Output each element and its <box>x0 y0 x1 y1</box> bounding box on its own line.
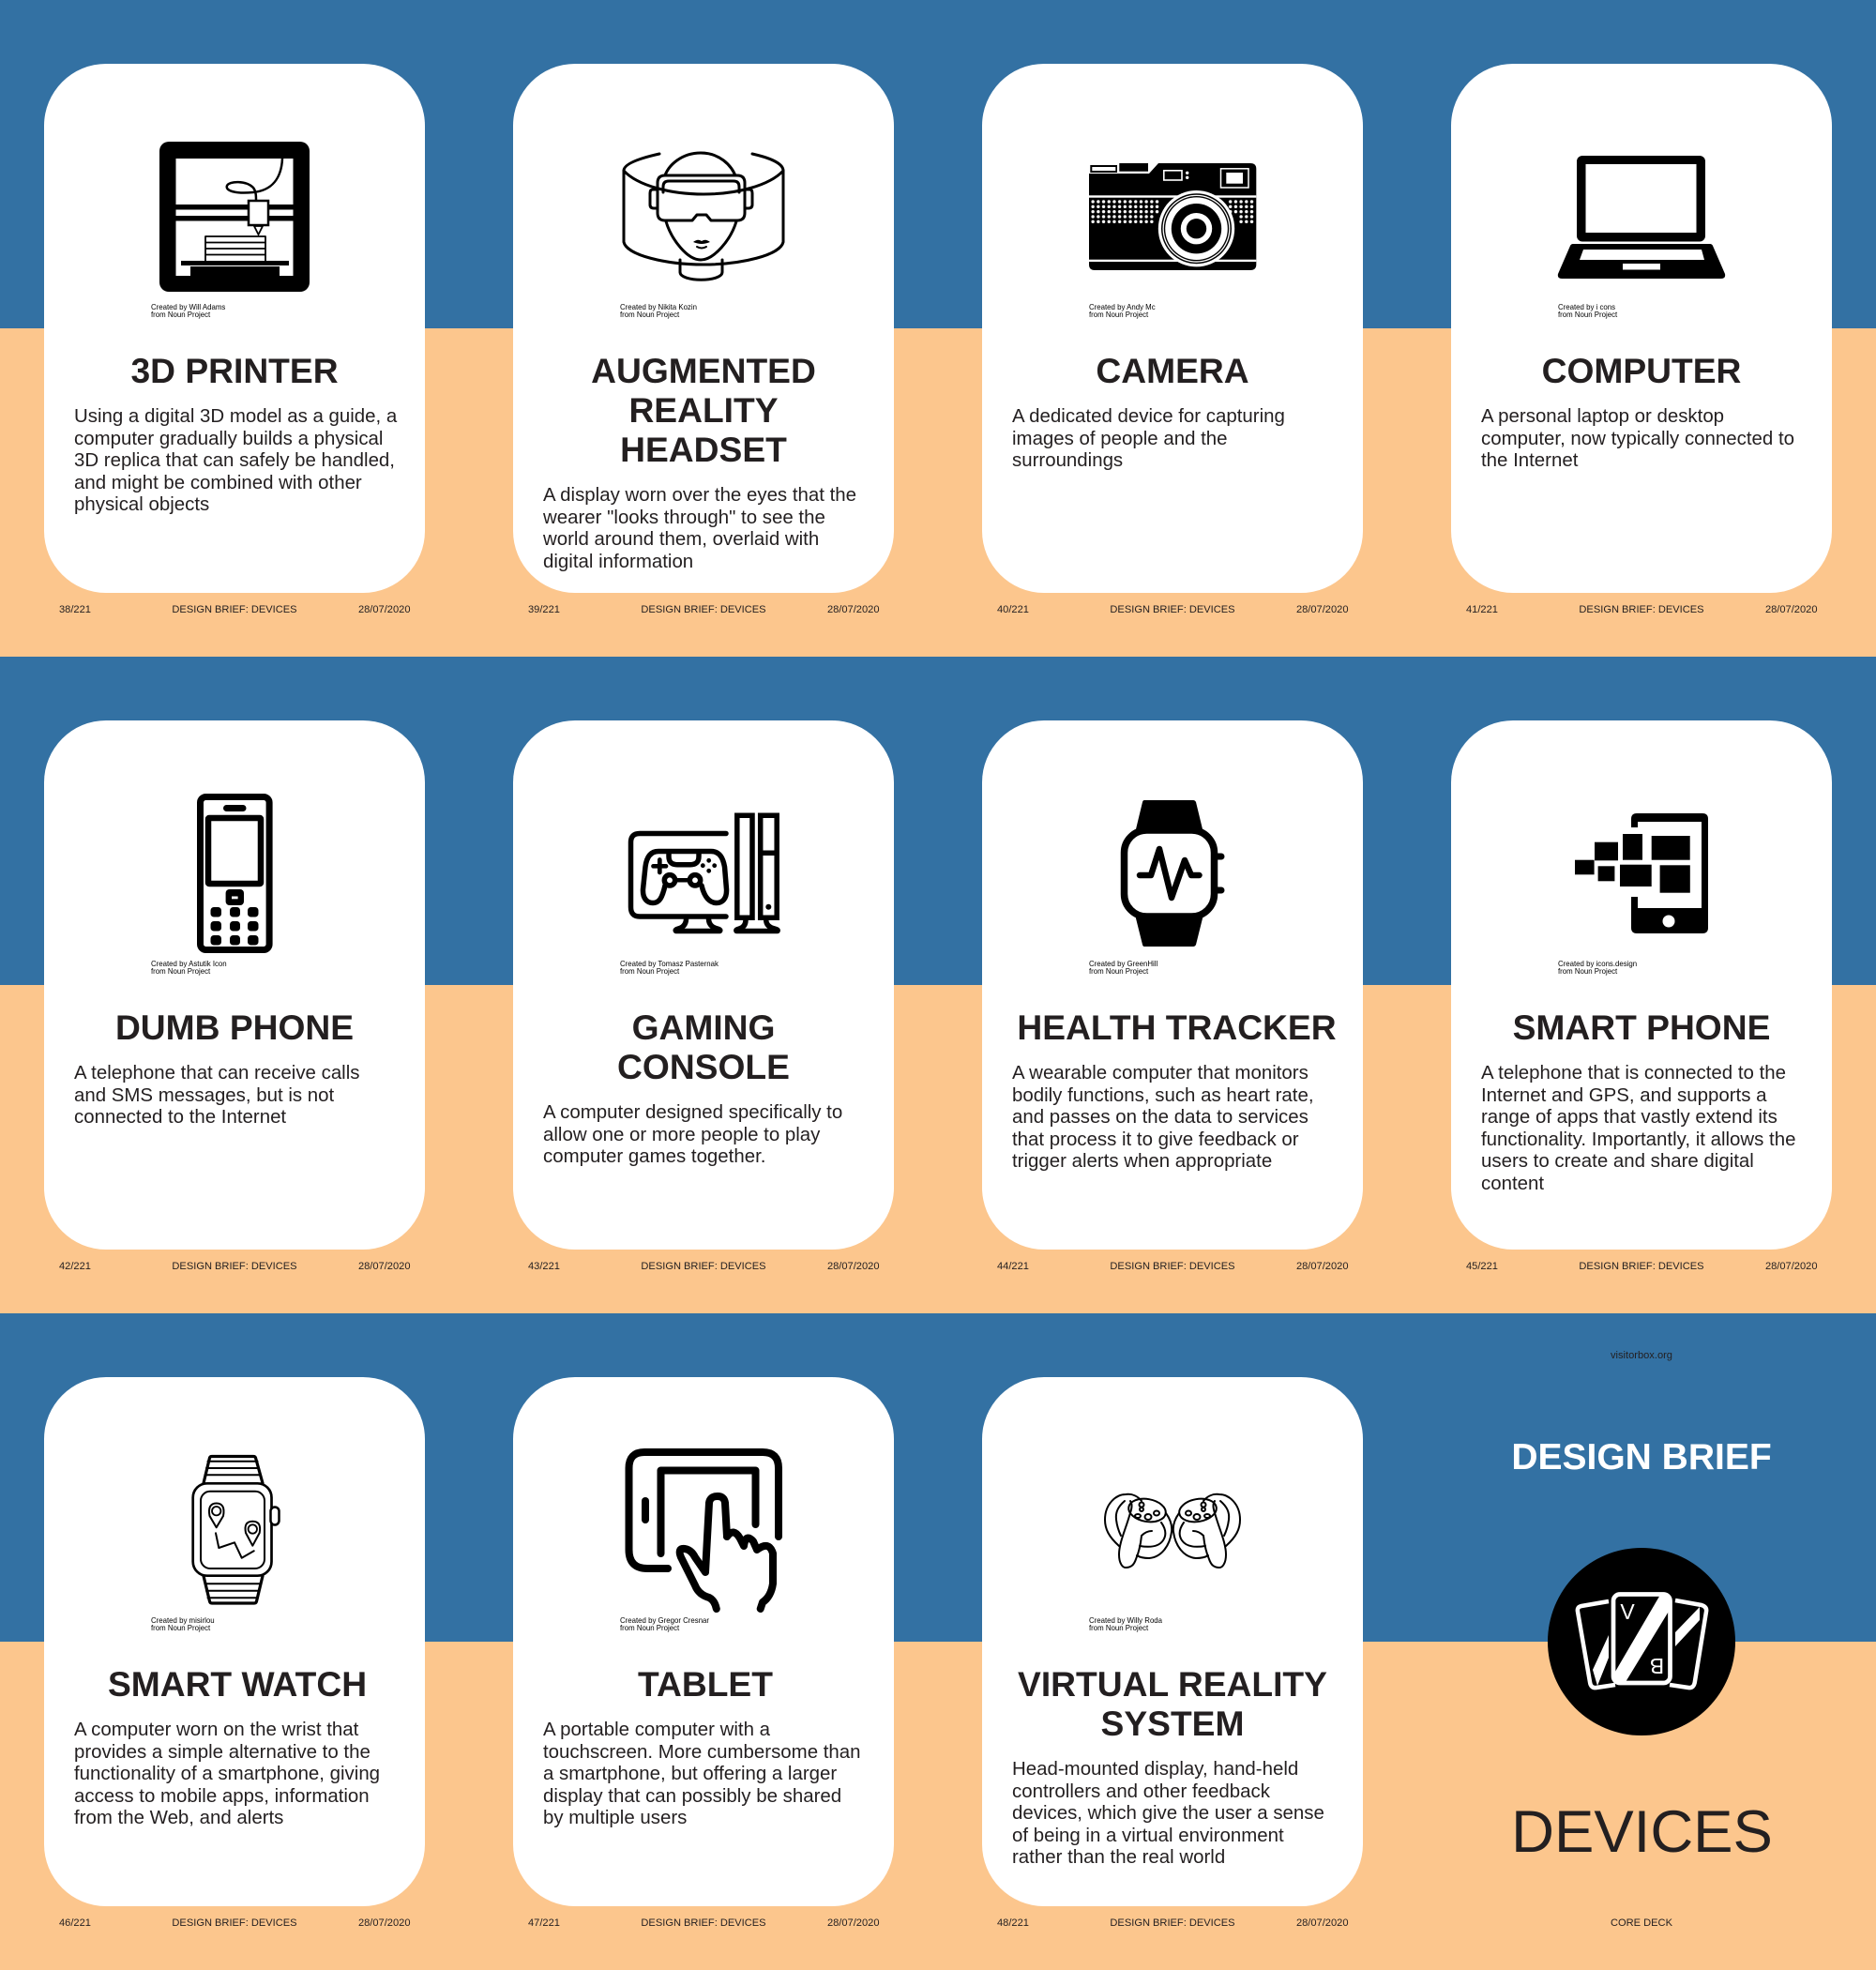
description: A portable computer with a <box>543 1719 770 1740</box>
right controller <box>1173 1494 1240 1568</box>
panel: smart phone <box>1451 720 1832 1272</box>
description: Using a digital 3D model as a guide, a <box>74 405 397 427</box>
heading: HEADSET <box>620 430 787 469</box>
icon credit <box>1089 1617 1162 1632</box>
description: wearer "looks through" to see the <box>543 507 825 528</box>
footer: deck name: DESIGN BRIEF: DEVICES <box>641 604 766 615</box>
footer: page number: 41/221 <box>1466 604 1498 615</box>
footer: date: 28/07/2020 <box>1296 604 1349 615</box>
footer: page number: 39/221 <box>528 604 560 615</box>
heading: SMART PHONE <box>1513 1008 1770 1047</box>
footer: deck name: DESIGN BRIEF: DEVICES <box>1110 604 1235 615</box>
description: controllers and other feedback <box>1012 1781 1270 1802</box>
heading <box>982 1664 1363 1743</box>
cover category title: DEVICES <box>1511 1799 1773 1865</box>
description: allow one or more people to play <box>543 1124 820 1145</box>
footer: page number: 42/221 <box>59 1261 91 1272</box>
heading: REALITY <box>628 390 779 430</box>
footer: date: 28/07/2020 <box>1765 604 1818 615</box>
cover heading: DESIGN BRIEF <box>1511 1437 1772 1478</box>
card background <box>1451 64 1832 593</box>
description: rather than the real world <box>1012 1846 1225 1868</box>
footer: deck name: DESIGN BRIEF: DEVICES <box>641 1917 766 1929</box>
icon: smart watch <box>190 1454 280 1606</box>
footer: date: 28/07/2020 <box>358 1261 411 1272</box>
panel: dumb phone <box>44 720 425 1272</box>
description: computer games together. <box>543 1145 765 1167</box>
description: range of apps that vastly extend its <box>1481 1106 1778 1128</box>
description: access to mobile apps, information <box>74 1785 370 1807</box>
logo: circle with cards <box>1548 1548 1735 1735</box>
logo: circle with cards: V <box>1620 1599 1635 1624</box>
panel: health tracker <box>982 720 1363 1272</box>
background band row 2 blue <box>0 657 1876 985</box>
footer: deck name: DESIGN BRIEF: DEVICES <box>1110 1917 1235 1929</box>
heading <box>591 351 816 469</box>
background band row 2 peach <box>0 985 1876 1313</box>
footer: page number: 38/221 <box>59 604 91 615</box>
description: and SMS messages, but is not <box>74 1084 334 1106</box>
icon: 3D printer <box>159 142 310 292</box>
icon: smart phone <box>1575 813 1708 933</box>
icon credit: from Noun Project <box>620 1623 679 1632</box>
icon credit: from Noun Project <box>620 966 679 976</box>
description: A computer worn on the wrist that <box>74 1719 358 1740</box>
card text <box>1481 351 1794 471</box>
icon: gaming console <box>628 812 780 934</box>
icon credit: Created by Willy Roda <box>1089 1615 1162 1625</box>
description: A personal laptop or desktop <box>1481 405 1724 427</box>
heading: CAMERA <box>1096 351 1249 390</box>
icon credit <box>1089 959 1157 976</box>
footer: deck name: DESIGN BRIEF: DEVICES <box>641 1261 766 1272</box>
heading: COMPUTER <box>1542 351 1741 390</box>
heading: GAMING <box>632 1008 775 1047</box>
description: touchscreen. More cumbersome than <box>543 1741 861 1763</box>
background band row 3 peach <box>0 1642 1876 1970</box>
card background <box>44 64 425 593</box>
card text <box>74 1008 360 1128</box>
description <box>74 1719 425 1829</box>
footer: deck name: DESIGN BRIEF: DEVICES <box>172 604 297 615</box>
panel: tablet <box>469 1313 938 1970</box>
footer: deck name: DESIGN BRIEF: DEVICES <box>1110 1261 1235 1272</box>
description: and passes on the data to services <box>1012 1106 1309 1128</box>
background band row 1 blue <box>0 0 1876 328</box>
card background <box>982 1377 1363 1906</box>
footer: date: 28/07/2020 <box>358 1917 411 1929</box>
icon credit <box>151 959 227 976</box>
icon credit <box>620 959 719 976</box>
heading: SMART WATCH <box>108 1664 367 1704</box>
description: trigger alerts when appropriate <box>1012 1150 1272 1172</box>
footer: date: 28/07/2020 <box>1296 1917 1349 1929</box>
description: A telephone that can receive calls <box>74 1062 360 1084</box>
card text <box>513 1664 894 1829</box>
cover footer label: CORE DECK <box>1611 1917 1672 1929</box>
card background <box>44 720 425 1250</box>
heading <box>617 1008 790 1086</box>
panel: smart watch <box>0 1313 469 1970</box>
description <box>1012 1758 1363 1869</box>
description: the Internet <box>1481 449 1578 471</box>
icon credit: Created by misirlou <box>151 1615 215 1625</box>
card background <box>513 1377 894 1906</box>
icon credit: Created by icons.design <box>1558 959 1637 968</box>
icon: camera <box>1089 163 1257 270</box>
panel: augmented reality headset <box>513 64 894 615</box>
icon credit: from Noun Project <box>1089 1623 1148 1632</box>
footer: deck name: DESIGN BRIEF: DEVICES <box>1579 1261 1704 1272</box>
footer: date: 28/07/2020 <box>827 1261 880 1272</box>
description: A dedicated device for capturing <box>1012 405 1285 427</box>
footer: page number: 40/221 <box>997 604 1029 615</box>
description: display that can possibly be shared <box>543 1785 841 1807</box>
description: users to create and share digital <box>1481 1150 1754 1172</box>
panel: computer <box>1451 64 1832 615</box>
description: A display worn over the eyes that the <box>543 484 856 506</box>
icon: laptop <box>1557 156 1726 279</box>
card text <box>44 1664 425 1829</box>
description: physical objects <box>74 493 209 515</box>
description <box>74 1062 360 1128</box>
icon credit: Created by GreenHill <box>1089 959 1157 968</box>
footer: page number: 48/221 <box>997 1917 1029 1929</box>
panel: gaming console <box>513 720 894 1272</box>
footer: date: 28/07/2020 <box>358 604 411 615</box>
panel: 3D printer <box>44 64 425 615</box>
description: functionality. Importantly, it allows the <box>1481 1129 1795 1150</box>
card text <box>1012 1008 1337 1172</box>
description <box>543 1101 842 1167</box>
panel: deck cover <box>1407 1313 1876 1970</box>
description <box>543 1719 894 1829</box>
icon credit: from Noun Project <box>1089 310 1148 319</box>
description: connected to the Internet <box>74 1106 286 1128</box>
description: functionality of a smartphone, giving <box>74 1763 380 1784</box>
footer: page number: 47/221 <box>528 1917 560 1929</box>
icon credit <box>151 302 225 319</box>
card text <box>543 351 856 572</box>
icon: health tracker watch <box>1120 800 1225 947</box>
footer: date: 28/07/2020 <box>1296 1261 1349 1272</box>
description <box>543 484 856 572</box>
background band row 3 blue <box>0 1313 1876 1642</box>
card background <box>1451 720 1832 1250</box>
description <box>1481 405 1794 471</box>
icon credit <box>1089 302 1156 319</box>
description: digital information <box>543 551 693 572</box>
heading: SYSTEM <box>1101 1704 1244 1743</box>
website label: visitorbox.org <box>1611 1349 1672 1360</box>
card text <box>1451 1008 1832 1194</box>
footer: date: 28/07/2020 <box>1765 1261 1818 1272</box>
icon credit: Created by Tomasz Pasternak <box>620 959 719 968</box>
footer: date: 28/07/2020 <box>827 604 880 615</box>
description: of being in a virtual environment <box>1012 1825 1284 1846</box>
description <box>74 405 398 515</box>
description: images of people and the <box>1012 428 1228 449</box>
description: a smartphone, but offering a larger <box>543 1763 837 1784</box>
heading: VIRTUAL REALITY <box>1018 1664 1327 1704</box>
panel: camera <box>982 64 1363 615</box>
footer: page number: 44/221 <box>997 1261 1029 1272</box>
card text <box>543 1008 842 1167</box>
icon credit: Created by Andy Mc <box>1089 302 1156 311</box>
icon credit: from Noun Project <box>151 1623 210 1632</box>
footer: page number: 43/221 <box>528 1261 560 1272</box>
heading: HEALTH TRACKER <box>1017 1008 1337 1047</box>
panel: virtual reality system <box>938 1313 1407 1970</box>
footer: deck name: DESIGN BRIEF: DEVICES <box>172 1261 297 1272</box>
description: content <box>1481 1173 1544 1194</box>
description: Head-mounted display, hand-held <box>1012 1758 1298 1780</box>
description: computer, now typically connected to <box>1481 428 1794 449</box>
icon credit: Created by i cons <box>1558 302 1615 311</box>
heading: AUGMENTED <box>591 351 816 390</box>
left controller <box>1105 1494 1172 1568</box>
description: from the Web, and alerts <box>74 1807 283 1828</box>
card background <box>44 1377 425 1906</box>
heading: TABLET <box>638 1664 773 1704</box>
icon credit: Created by Nikita Kozin <box>620 302 697 311</box>
description: computer gradually builds a physical <box>74 428 383 449</box>
description: world around them, overlaid with <box>543 528 819 550</box>
description: devices, which give the user a sense <box>1012 1802 1324 1824</box>
icon credit: from Noun Project <box>1558 966 1617 976</box>
description: provides a simple alternative to the <box>74 1741 371 1763</box>
card text <box>982 1664 1363 1869</box>
footer: page number: 46/221 <box>59 1917 91 1929</box>
background band row 1 peach <box>0 328 1876 657</box>
description: A computer designed specifically to <box>543 1101 842 1123</box>
description: by multiple users <box>543 1807 687 1828</box>
icon: dumb phone <box>197 794 273 953</box>
icon credit <box>1558 959 1637 976</box>
description: that process it to give feedback or <box>1012 1129 1299 1150</box>
icon credit <box>620 302 697 319</box>
icon: VR controllers <box>1103 1492 1242 1570</box>
card text <box>74 351 398 515</box>
card text <box>1012 351 1285 471</box>
description <box>1481 1062 1832 1194</box>
icon credit <box>151 1617 215 1632</box>
card background <box>513 64 894 593</box>
footer: page number: 45/221 <box>1466 1261 1498 1272</box>
description: Internet and GPS, and supports a <box>1481 1084 1767 1106</box>
footer: date: 28/07/2020 <box>827 1917 880 1929</box>
footer: deck name: DESIGN BRIEF: DEVICES <box>1579 604 1704 615</box>
icon credit: Created by Will Adams <box>151 302 225 311</box>
description: 3D replica that can safely be handled, <box>74 449 395 471</box>
description <box>1012 1062 1314 1172</box>
description: A telephone that is connected to the <box>1481 1062 1786 1084</box>
heading: 3D PRINTER <box>130 351 339 390</box>
icon credit: Created by Gregor Cresnar <box>620 1615 709 1625</box>
icon: AR headset <box>622 152 785 281</box>
description: bodily functions, such as heart rate, <box>1012 1084 1314 1106</box>
card background <box>513 720 894 1250</box>
logo: circle with cards: B <box>1650 1654 1664 1678</box>
icon credit <box>1558 302 1617 319</box>
card background <box>982 64 1363 593</box>
description: and might be combined with other <box>74 472 362 493</box>
icon credit: from Noun Project <box>151 966 210 976</box>
icon credit: from Noun Project <box>151 310 210 319</box>
heading: CONSOLE <box>617 1047 790 1086</box>
icon credit: from Noun Project <box>1558 310 1617 319</box>
icon credit: from Noun Project <box>620 310 679 319</box>
footer: deck name: DESIGN BRIEF: DEVICES <box>172 1917 297 1929</box>
icon credit <box>620 1617 709 1632</box>
description: A wearable computer that monitors <box>1012 1062 1309 1084</box>
heading: DUMB PHONE <box>115 1008 354 1047</box>
card background <box>982 720 1363 1250</box>
icon credit: from Noun Project <box>1089 966 1148 976</box>
icon credit: Created by Astutik Icon <box>151 959 227 968</box>
icon: tablet with hand <box>625 1448 786 1614</box>
description <box>1012 405 1285 471</box>
description: surroundings <box>1012 449 1123 471</box>
